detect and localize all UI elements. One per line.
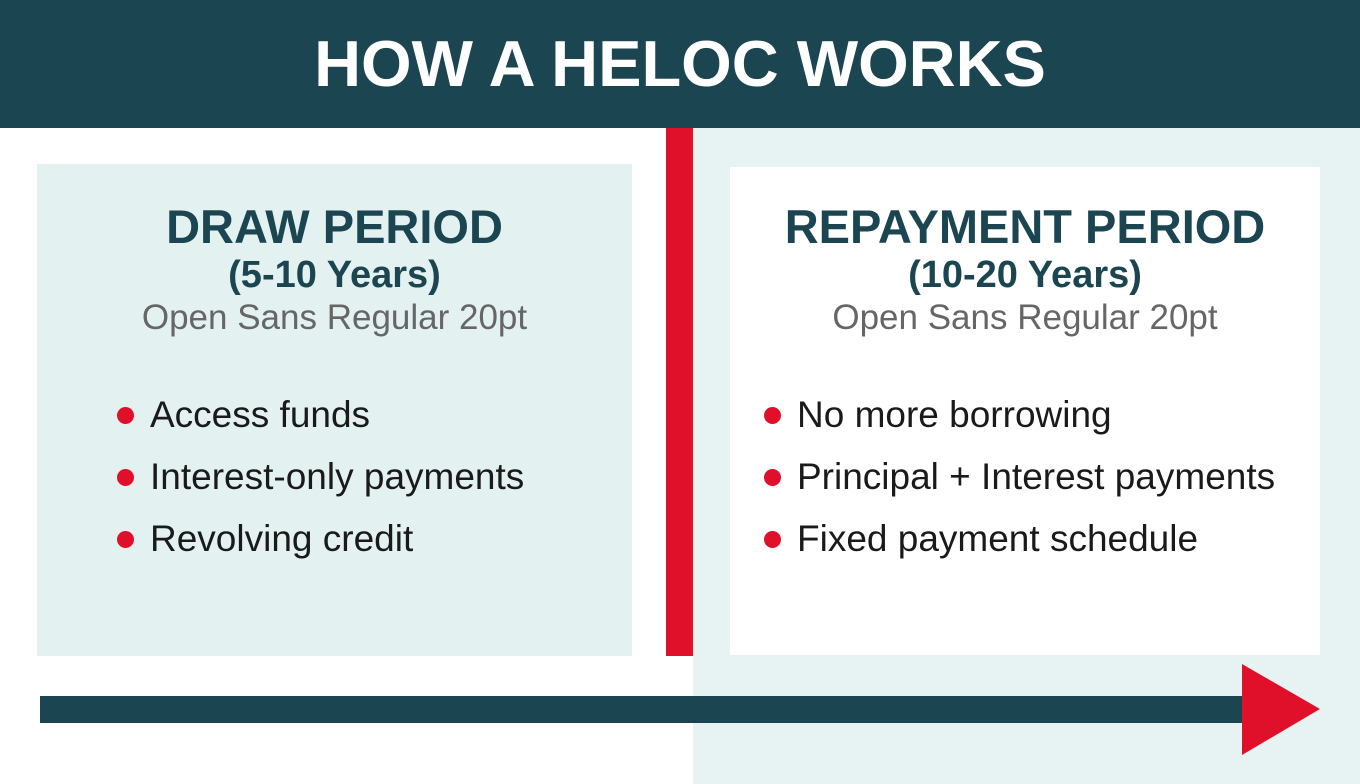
panel: repayment period [730,167,1320,655]
heading: draw period: DRAW PERIOD [166,200,503,253]
title [0,0,1360,128]
bullet list: Principal + Interest payments [797,456,1275,497]
bullet list [764,394,1275,559]
red divider [666,128,693,656]
font note: Open Sans Regular 20pt [832,298,1218,337]
bullet list: Interest-only payments [150,456,524,497]
bullet list: Access funds [150,394,370,435]
title: HOW A HELOC WORKS [314,27,1046,100]
heading: repayment period: REPAYMENT PERIOD [785,200,1265,253]
subheading: years: (5-10 Years) [228,254,441,296]
bullet list: Fixed payment schedule [797,518,1198,559]
subheading: years: (10-20 Years) [908,254,1142,296]
bullet list [117,394,524,559]
panel: draw period [37,164,632,656]
bullet list: No more borrowing [797,394,1112,435]
bullet list: Revolving credit [150,518,413,559]
font note: Open Sans Regular 20pt [142,298,527,337]
